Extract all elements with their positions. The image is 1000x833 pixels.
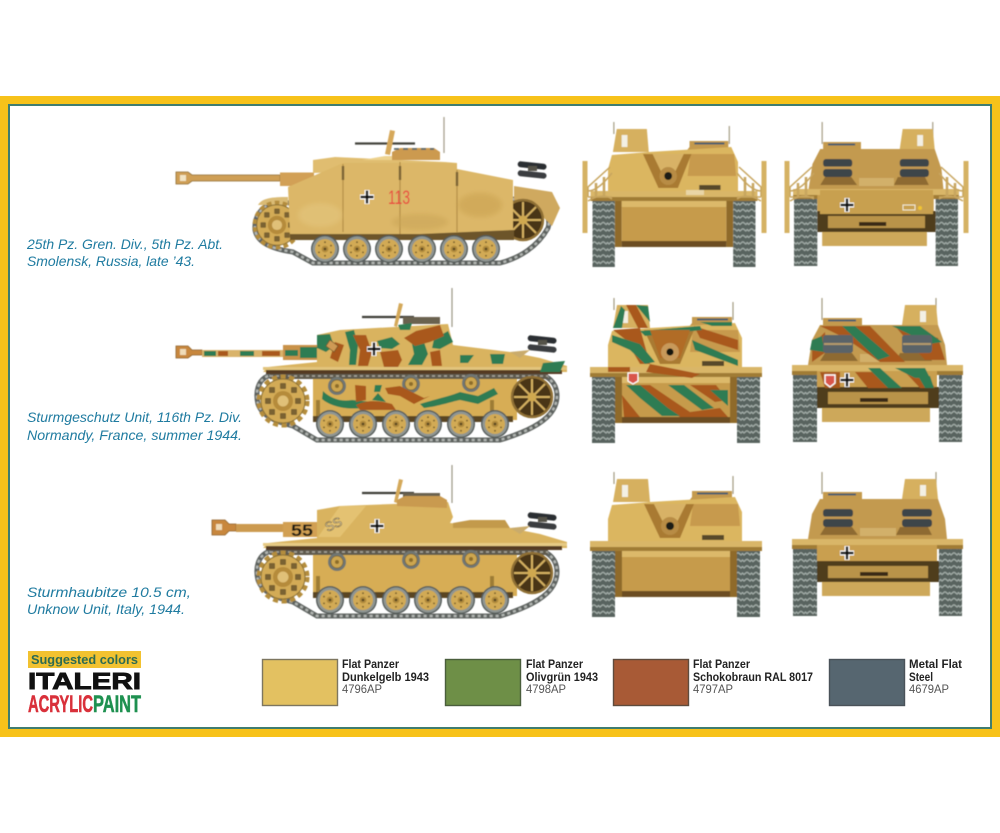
caption: scheme 2: Normandy, France, summer 1944. bbox=[27, 427, 242, 443]
legend: Dunkelgelb: Flat Panzer bbox=[342, 659, 399, 671]
camouflage pattern bbox=[810, 326, 945, 388]
suggested colors tag: Suggested colors bbox=[31, 652, 138, 667]
unit emblem bbox=[825, 375, 835, 387]
panel: scheme 1 rear view bbox=[787, 122, 966, 266]
panel: scheme 2 side view bbox=[176, 288, 567, 440]
railing left bbox=[787, 161, 814, 233]
legend: Steel bbox=[830, 659, 962, 706]
Italeri wordmark: ITALERI bbox=[28, 668, 141, 694]
legend: Olivgrun: Flat Panzer bbox=[526, 659, 583, 671]
legend: Steel: Steel bbox=[909, 672, 933, 684]
legend: Olivgrun: 4798AP bbox=[526, 684, 566, 696]
balkenkreuz bbox=[367, 342, 381, 356]
caption: scheme 3 bbox=[27, 584, 191, 617]
legend: Dunkelgelb bbox=[262, 659, 429, 706]
hull and superstructure bbox=[212, 465, 567, 550]
balkenkreuz bbox=[840, 373, 854, 387]
caption: scheme 1 bbox=[26, 236, 223, 269]
hull and superstructure bbox=[176, 288, 567, 374]
track and running gear bbox=[255, 186, 560, 263]
caption: scheme 1: Smolensk, Russia, late ’43. bbox=[27, 253, 195, 269]
caption: scheme 2 bbox=[27, 409, 242, 443]
panel: scheme 2 rear view bbox=[792, 298, 963, 442]
spare road wheels bbox=[517, 161, 547, 179]
camouflage pattern bbox=[608, 305, 738, 417]
unit emblem bbox=[628, 373, 638, 384]
legend: Dunkelgelb: Dunkelgelb 1943 bbox=[342, 672, 429, 684]
panel: scheme 3 front view bbox=[590, 472, 762, 617]
page frame bbox=[0, 96, 1000, 737]
panel: scheme 1 side view bbox=[176, 117, 560, 263]
legend: Schokobraun: 4797AP bbox=[693, 684, 733, 696]
railing left bbox=[585, 161, 612, 233]
cupola, machine gun and antenna bbox=[355, 117, 444, 160]
balkenkreuz bbox=[370, 519, 384, 533]
panel: scheme 2 front view bbox=[590, 298, 762, 443]
railing right bbox=[939, 161, 966, 233]
panel: scheme 1 front view bbox=[585, 122, 764, 267]
logo: Italeri Acrylic Paint bbox=[28, 651, 141, 718]
legend: Steel: 4679AP bbox=[909, 684, 949, 696]
legend: Dunkelgelb: 4796AP bbox=[342, 684, 382, 696]
superstructure and side skirts bbox=[288, 157, 513, 234]
tactical number 113: 113 bbox=[388, 188, 410, 209]
caption: scheme 3: Sturmhaubitze 10.5 cm, bbox=[27, 584, 191, 600]
camouflage pattern bbox=[204, 323, 565, 410]
running gear bbox=[257, 550, 557, 616]
caption: scheme 2: Sturmgeschutz Unit, 116th Pz. Div. bbox=[27, 409, 242, 425]
caption: scheme 3: Unknow Unit, Italy, 1944. bbox=[27, 601, 185, 617]
caption: scheme 1: 25th Pz. Gren. Div., 5th Pz. Abt. bbox=[26, 236, 223, 252]
legend: Olivgrun: Olivgrün 1943 bbox=[526, 672, 598, 684]
panel: scheme 3 side view bbox=[212, 465, 567, 616]
railing right bbox=[737, 161, 764, 233]
running gear bbox=[257, 374, 557, 440]
barrel bbox=[176, 172, 314, 186]
Acrylic Paint wordmark: ACRYLIC bbox=[28, 691, 93, 718]
Acrylic Paint wordmark: PAINT bbox=[93, 691, 141, 718]
legend: Schokobraun: Schokobraun RAL 8017 bbox=[693, 672, 813, 684]
SS runes: SS bbox=[322, 514, 345, 535]
legend: Schokobraun: Flat Panzer bbox=[693, 659, 750, 671]
balkenkreuz bbox=[360, 190, 374, 204]
legend: Olivgrun bbox=[446, 659, 598, 706]
panel: scheme 3 rear view bbox=[792, 472, 963, 616]
legend: Schokobraun bbox=[614, 659, 813, 706]
tactical number 55: 55 bbox=[291, 521, 313, 540]
legend: Steel: Metal Flat bbox=[909, 659, 962, 671]
